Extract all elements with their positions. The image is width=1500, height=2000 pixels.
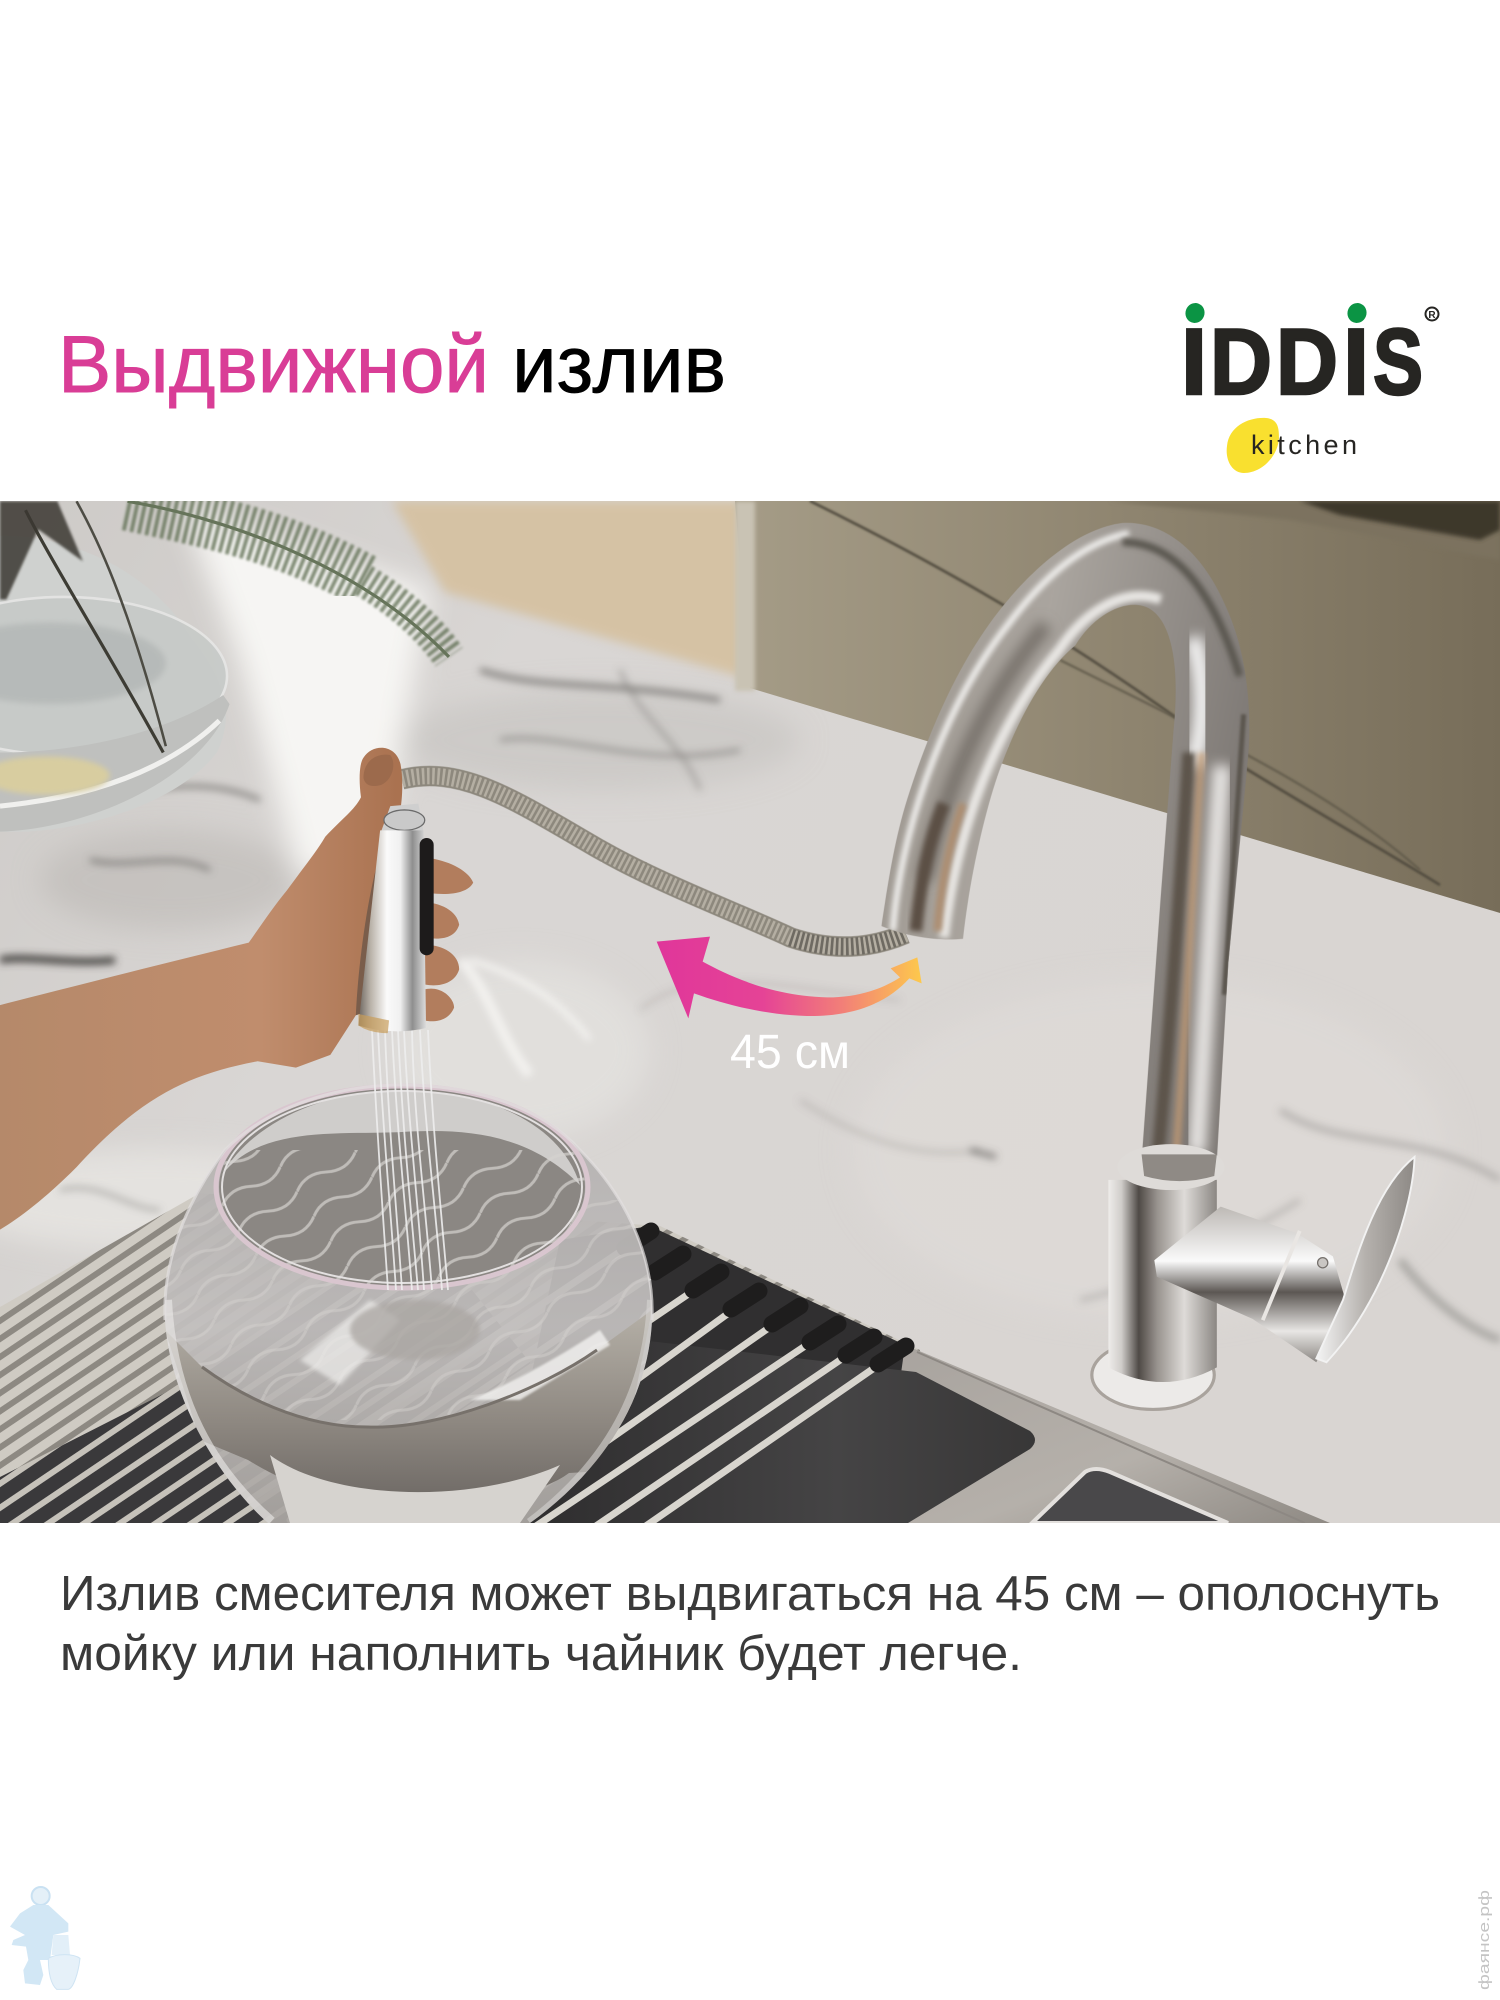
logo: IDDIS kitchen	[1181, 300, 1438, 473]
faucet spout	[881, 523, 1249, 1161]
stainless sink rim and basins	[540, 1340, 1330, 1523]
hand and arm	[0, 748, 473, 1230]
title: излив	[512, 320, 726, 410]
water stream	[372, 1030, 448, 1290]
spray head handle	[358, 804, 434, 1033]
logo: IDDIS kitchen: D	[1210, 309, 1272, 414]
faucet base and collar	[1092, 1144, 1224, 1409]
black rack caps and white rods	[250, 1231, 906, 1530]
hose	[402, 776, 906, 947]
body text: Излив смесителя может выдвигаться на 45 см – ополоснуть	[60, 1567, 1440, 1621]
panel: header with title and logo	[58, 303, 1440, 473]
fern leaves	[128, 501, 449, 657]
label: 45 см: 45 см	[730, 1026, 850, 1079]
glass bowl of water	[150, 1080, 670, 1530]
marble countertop	[0, 501, 1500, 1523]
logo: IDDIS kitchen: kitchen	[1251, 430, 1357, 460]
blurred floor and wall background	[392, 501, 1500, 913]
glass vase with plate	[0, 501, 230, 832]
title: Выдвижной	[58, 320, 489, 410]
sink rack with rods	[0, 1193, 920, 1523]
body text: мойку или наполнить чайник будет легче.	[60, 1627, 1022, 1681]
logo: IDDIS kitchen: D	[1276, 309, 1338, 414]
watermark: vertical site name: фаянсе.рф	[1476, 1890, 1493, 1990]
arrow: 45 cm pink-to-yellow double arrow	[656, 936, 922, 1018]
body text	[60, 1567, 1440, 1681]
panel: kitchen photo scene	[0, 501, 1500, 1523]
logo: IDDIS kitchen: R	[1428, 310, 1436, 321]
mixer lever	[1154, 1157, 1415, 1362]
icon: plumber watermark	[10, 1886, 80, 1990]
logo: IDDIS kitchen: I	[1181, 309, 1207, 414]
logo: IDDIS kitchen: I	[1343, 309, 1369, 414]
title	[58, 320, 726, 410]
logo: IDDIS kitchen: S	[1373, 309, 1423, 414]
